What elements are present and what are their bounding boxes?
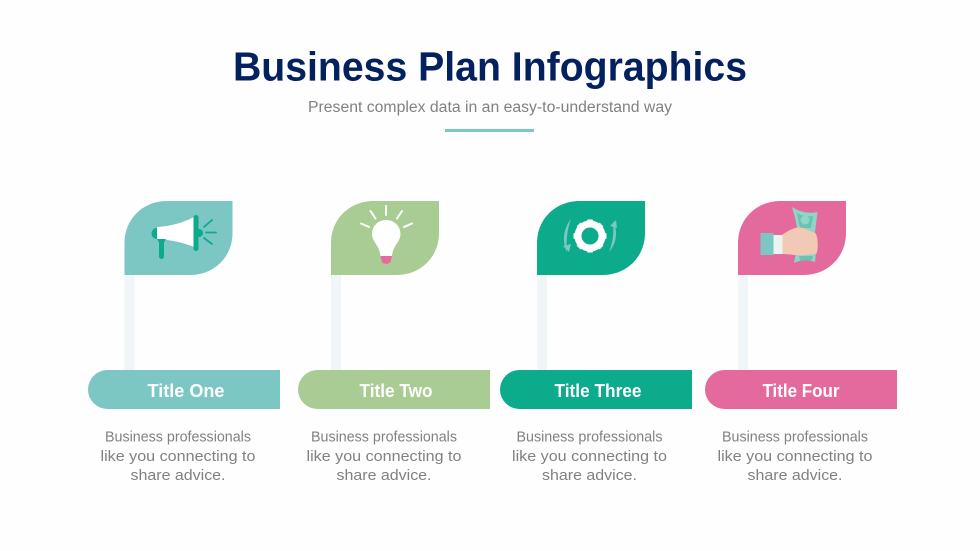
title underline bbox=[445, 129, 534, 132]
flag two bbox=[331, 201, 439, 275]
description two: like you connecting to bbox=[306, 448, 462, 465]
flag pole two bbox=[331, 275, 341, 370]
panel: step one bbox=[88, 201, 280, 484]
description one: Business professionals bbox=[105, 428, 251, 446]
icon: hand holding money bbox=[760, 207, 818, 263]
description two: Business professionals bbox=[311, 428, 457, 446]
icon: gear with arrows bbox=[563, 219, 617, 252]
description one: share advice. bbox=[130, 467, 226, 484]
title one: Title One bbox=[148, 380, 224, 401]
flag pole four bbox=[738, 275, 748, 370]
title bar one bbox=[88, 370, 280, 409]
flag three bbox=[537, 201, 645, 275]
panel: step four bbox=[705, 201, 897, 484]
title three: Title Three bbox=[554, 380, 642, 401]
title bar three bbox=[500, 370, 692, 409]
title four: Title Four bbox=[762, 380, 840, 401]
panel: step two bbox=[298, 201, 490, 484]
description four: Business professionals bbox=[722, 428, 868, 446]
flag pole one bbox=[124, 275, 134, 370]
description three: Business professionals bbox=[516, 428, 662, 446]
icon: light bulb bbox=[361, 206, 412, 264]
flag four bbox=[738, 201, 846, 275]
subtitle: Present complex data in an easy-to-understand way bbox=[308, 99, 672, 116]
title bar four bbox=[705, 370, 897, 409]
title: Business Plan Infographics bbox=[233, 44, 747, 90]
description three: share advice. bbox=[542, 467, 637, 484]
description one: like you connecting to bbox=[100, 448, 256, 465]
flag pole three bbox=[537, 275, 547, 370]
description four: like you connecting to bbox=[718, 448, 872, 465]
icon: megaphone bbox=[152, 215, 216, 259]
description four: share advice. bbox=[748, 467, 842, 484]
flag one bbox=[124, 201, 232, 275]
title two: Title Two bbox=[360, 380, 432, 401]
title bar two bbox=[298, 370, 490, 409]
panel: step three bbox=[500, 201, 692, 484]
description three: like you connecting to bbox=[512, 448, 667, 465]
description two: share advice. bbox=[336, 467, 432, 484]
